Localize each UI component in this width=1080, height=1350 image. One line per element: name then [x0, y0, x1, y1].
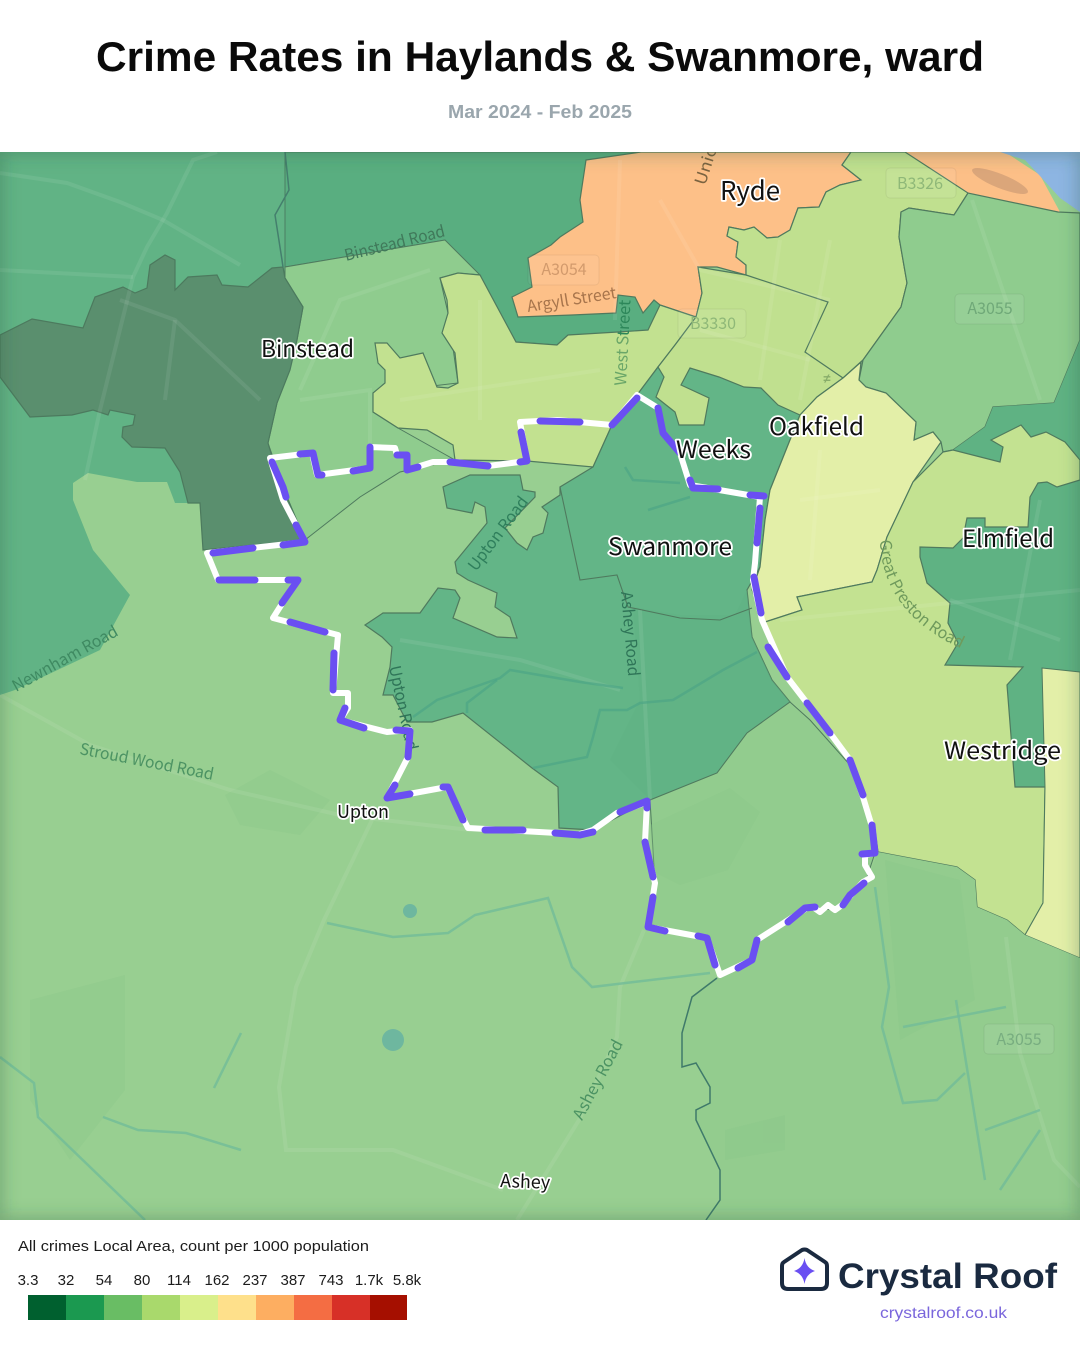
road shield: A3054: [528, 255, 599, 285]
road shield: A3055 north: [955, 294, 1024, 324]
place label: Elmfield: Elmfield: [962, 519, 1054, 554]
title: Crime Rates in Haylands & Swanmore, ward: [96, 33, 984, 80]
legend scale labels: [18, 1272, 422, 1289]
river north-west: [275, 152, 289, 267]
Swanmore inner shade: [716, 590, 790, 772]
road label: Stroud Wood Road: Stroud Wood Road: [78, 735, 216, 785]
road shield: B3326: B3326: [897, 170, 943, 194]
road label: Argyll Street: Argyll Street: [525, 279, 618, 317]
river boundary: [682, 978, 720, 1220]
road label: Great Preston Road: Great Preston Road: [880, 540, 965, 648]
road label: West Street: West Street: [607, 299, 635, 386]
region: north-east yellow-green: [640, 152, 968, 430]
region: Westridge yellow-green: [765, 425, 1080, 935]
road shield: B3330: B3330: [690, 310, 736, 334]
rail symbol: ≠: [823, 371, 831, 386]
region: east medium green: [859, 193, 1080, 452]
place label: Binstead: Binstead: [261, 330, 354, 364]
region: ward south part: [650, 702, 874, 910]
sea: [1000, 152, 1080, 212]
legend scale labels: 237: [242, 1272, 268, 1289]
ward outline: purple dashes: [213, 398, 875, 968]
beach patch: [972, 168, 1028, 194]
legend scale labels: 743: [318, 1272, 344, 1289]
legend title: All crimes Local Area, count per 1000 population: [18, 1238, 369, 1255]
road label: Ashey Road north: Ashey Road: [616, 590, 647, 677]
legend scale labels: 32: [58, 1272, 74, 1289]
field shade patches: [651, 824, 654, 867]
legend scale labels: 162: [204, 1272, 230, 1289]
subtitle: date range: Mar 2024 - Feb 2025: [448, 102, 632, 122]
region: Ryde orange: [512, 152, 861, 317]
place label: Oakfield: Oakfield: [769, 407, 864, 442]
legend colour bar: [28, 1295, 407, 1320]
ponds: [382, 904, 417, 1051]
legend scale labels: 80: [134, 1272, 150, 1289]
road shield: A3054: A3054: [541, 256, 587, 280]
ward outline: white base: [207, 395, 875, 975]
legend scale labels: 54: [96, 1272, 112, 1289]
logo wordmark: Crystal Roof: [838, 1257, 1057, 1296]
logo icon: house with star: [782, 1250, 827, 1289]
place label: Swanmore: Swanmore: [608, 527, 732, 562]
region: Swanmore dark green: [365, 367, 800, 830]
road label: Upton Road south: Upton Road: [384, 663, 425, 752]
place label: Westridge: Westridge: [944, 731, 1061, 766]
legend scale labels: 5.8k: [393, 1272, 422, 1289]
website link: crystalroof.co.uk: [880, 1305, 1008, 1322]
legend scale labels: 387: [280, 1272, 306, 1289]
region: seafront orange: [905, 152, 1060, 212]
region: north-west dark green: [0, 152, 303, 695]
road label: Union Street: Unio: [687, 142, 722, 188]
ward divider lines: [746, 275, 843, 378]
road label: Ashey Road south: Ashey Road: [565, 1034, 628, 1123]
place label: Weeks: Weeks: [676, 430, 751, 465]
region: Oakfield pale yellow: [752, 362, 941, 622]
region: central yellow-green: [373, 273, 696, 467]
streams: [0, 887, 1040, 1220]
region: south-east medium green: [878, 852, 1080, 958]
road label: Upton Road north: Upton Road: [461, 490, 533, 575]
place label: Ryde: Ryde: [720, 171, 780, 208]
road shield: B3330: [678, 309, 746, 338]
legend scale labels: 3.3: [18, 1272, 38, 1289]
region: south-east pale yellow: [1025, 668, 1080, 958]
legend scale labels: 114: [167, 1272, 191, 1289]
place label: Upton: Upton: [337, 798, 389, 824]
road shield: A3055 south: A3055: [996, 1026, 1042, 1050]
road label: Binstead Road: Binstead Road: [341, 218, 447, 266]
edge vignette: [0, 146, 1080, 1226]
road shield: A3055 north: A3055: [967, 295, 1013, 319]
place label: Ashey: Ashey: [500, 1167, 551, 1195]
road shield: A3055 south: [984, 1024, 1054, 1054]
region: north centre dark green: [285, 152, 670, 345]
region: east dark green: [920, 340, 1080, 787]
region: darkest Binstead west: [0, 255, 305, 550]
legend scale labels: 1.7k: [355, 1272, 384, 1289]
road network: [0, 152, 1080, 821]
ward streams: [413, 467, 757, 768]
Swanmore inner boundary lines: [560, 487, 752, 620]
region: Binstead medium green: [268, 240, 480, 540]
road label: Newnham Road: Newnham Road: [7, 618, 122, 696]
road shield: B3326: [886, 168, 956, 198]
